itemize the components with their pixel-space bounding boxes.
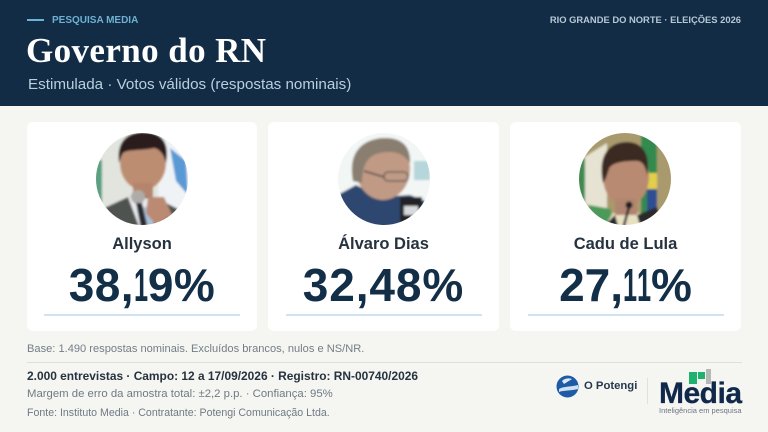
percentage: 38, 9% bbox=[69, 259, 215, 311]
logo wordmark: Media bbox=[659, 377, 742, 410]
percentage: 1 bbox=[134, 259, 148, 311]
percentage: 32,48% bbox=[303, 259, 464, 311]
logo wordmark: O Potengi bbox=[584, 380, 637, 392]
base note: Base: 1.490 respostas nominais. Excluídos brancos, nulos e NS/NR. bbox=[27, 343, 364, 355]
candidate name: Allyson bbox=[112, 235, 172, 253]
photo: Allyson bbox=[96, 133, 188, 225]
icon: logo squares bbox=[689, 369, 711, 384]
eyebrow label: PESQUISA MEDIA bbox=[52, 15, 138, 26]
candidate name: Cadu de Lula bbox=[574, 235, 677, 253]
icon: globe bbox=[556, 376, 578, 398]
source: Fonte: Instituto Media · Contratante: Potengi Comunicação Ltda. bbox=[27, 407, 330, 419]
underline bar bbox=[44, 314, 240, 316]
panel: Allyson bbox=[27, 122, 257, 331]
candidate name: Álvaro Dias bbox=[338, 235, 429, 253]
margin of error: Margem de erro da amostra total: ±2,2 p.p. · Confiança: 95% bbox=[27, 388, 333, 400]
header band bbox=[0, 0, 768, 106]
percentage: 1 bbox=[637, 259, 651, 311]
accent dash bbox=[27, 19, 44, 21]
logo: O Potengi bbox=[556, 376, 637, 398]
methodology line: 2.000 entrevistas · Campo: 12 a 17/09/2026 · Registro: RN-00740/2026 bbox=[27, 369, 418, 383]
underline bar bbox=[286, 314, 482, 316]
photo: Álvaro Dias bbox=[338, 133, 430, 225]
panel: Cadu de Lula bbox=[510, 122, 741, 331]
percentage: 1 bbox=[623, 259, 637, 311]
underline bar bbox=[528, 314, 724, 316]
subtitle: Estimulada · Votos válidos (respostas nominais) bbox=[28, 76, 351, 93]
region label: RIO GRANDE DO NORTE · ELEIÇÕES 2026 bbox=[550, 14, 741, 25]
title: Governo do RN bbox=[26, 31, 266, 70]
percentage: 27, % bbox=[559, 259, 692, 311]
logo: Media bbox=[659, 369, 742, 415]
photo: Cadu de Lula bbox=[579, 133, 671, 225]
panel: Álvaro Dias bbox=[268, 122, 499, 331]
logo tagline: Inteligência em pesquisa bbox=[659, 406, 742, 415]
